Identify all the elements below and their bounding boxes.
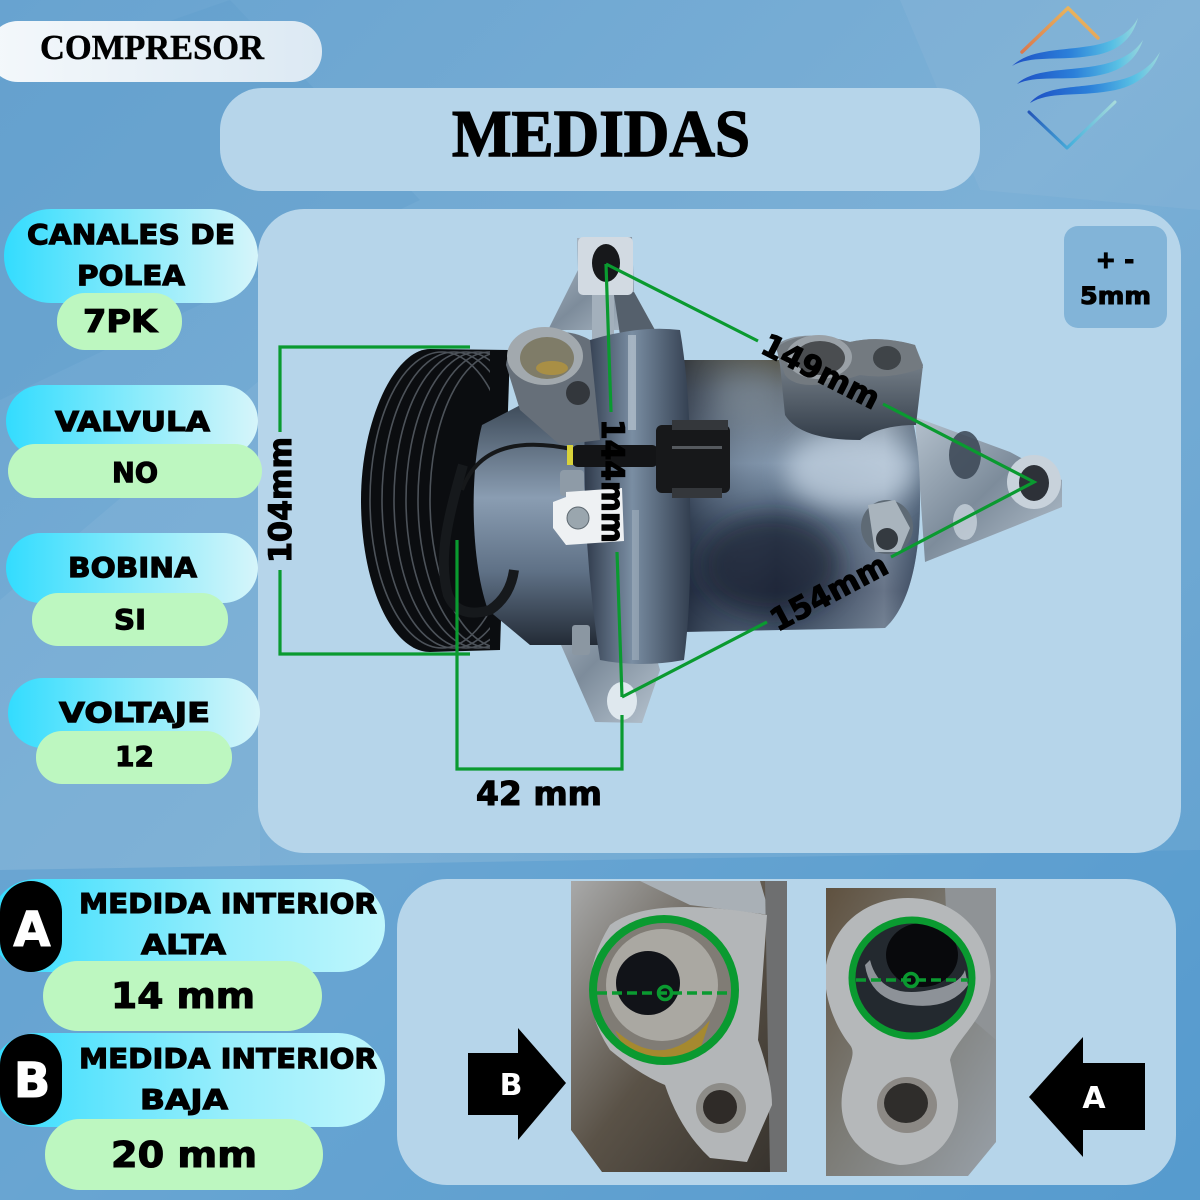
bottom mount — [538, 593, 660, 723]
right mount — [915, 417, 1062, 562]
measure A — [0, 879, 385, 1031]
label: compresor: COMPRESOR — [40, 28, 265, 67]
spec: voltaje — [8, 678, 260, 784]
holes — [592, 244, 620, 282]
logo — [1012, 8, 1160, 148]
measure B: MEDIDA INTERIOR — [79, 1042, 377, 1075]
wire — [462, 445, 576, 490]
measure A: ALTA — [141, 928, 226, 961]
clutch hub — [474, 400, 600, 645]
label: 144mm: 144mm — [594, 419, 630, 543]
connector — [572, 445, 658, 467]
spec: bobina: BOBINA — [68, 551, 197, 584]
flange — [584, 329, 690, 664]
dimension: height bracket — [280, 347, 470, 654]
photo: port B — [571, 881, 787, 1172]
rear body — [680, 360, 920, 632]
bracket — [560, 470, 584, 496]
spec: voltaje: VOLTAJE — [59, 696, 210, 729]
arrow B — [468, 1028, 566, 1140]
arrow A: A — [1082, 1081, 1106, 1116]
spec: voltaje: 12 — [115, 740, 154, 773]
label: 154mm: 154mm — [764, 547, 894, 639]
highlight ring: port A — [852, 920, 972, 1036]
spec: valvula: VALVULA — [55, 405, 210, 438]
measure B: 20 mm — [111, 1135, 257, 1176]
title: medidas: MEDIDAS — [452, 97, 750, 171]
rear port block — [776, 336, 923, 440]
label: 104mm: 104mm — [263, 437, 299, 563]
title: medidas — [220, 88, 980, 191]
spec: bobina: SI — [114, 603, 146, 636]
measure B: B — [14, 1053, 50, 1109]
top mount — [548, 237, 655, 330]
arrow B: B — [500, 1068, 522, 1103]
arrow A — [1029, 1037, 1145, 1157]
tolerance box — [1064, 226, 1167, 328]
bolt — [861, 500, 913, 554]
spec: canales de polea — [4, 209, 258, 350]
spec: canales de polea: POLEA — [77, 259, 185, 292]
panel: port photos — [397, 879, 1176, 1185]
pulley — [361, 349, 510, 652]
compressor illustration — [361, 237, 1062, 723]
measure B: BAJA — [140, 1083, 228, 1116]
spec: canales de polea: 7PK — [83, 304, 158, 340]
tolerance box: + - — [1096, 246, 1134, 274]
panel: compressor diagram — [258, 209, 1181, 853]
dimension: depth bracket — [457, 540, 622, 769]
lower bolts — [572, 625, 590, 655]
label: 149mm: 149mm — [755, 327, 886, 417]
spec: canales de polea: CANALES DE — [27, 218, 235, 251]
spec: bobina — [6, 533, 258, 646]
tolerance box: 5mm — [1080, 282, 1151, 310]
photo: port A — [825, 888, 996, 1176]
spec: valvula — [6, 385, 262, 498]
measure A: 14 mm — [111, 976, 255, 1017]
measure A: A — [13, 902, 51, 958]
measure B — [0, 1033, 385, 1190]
spec: valvula: NO — [112, 456, 158, 489]
label: compresor — [0, 21, 322, 82]
highlight ring: port B — [593, 919, 735, 1061]
high port block — [506, 332, 600, 445]
label: 42 mm: 42 mm — [476, 774, 602, 813]
dimension: triangle lines — [606, 264, 1034, 697]
measure A: MEDIDA INTERIOR — [79, 887, 377, 920]
